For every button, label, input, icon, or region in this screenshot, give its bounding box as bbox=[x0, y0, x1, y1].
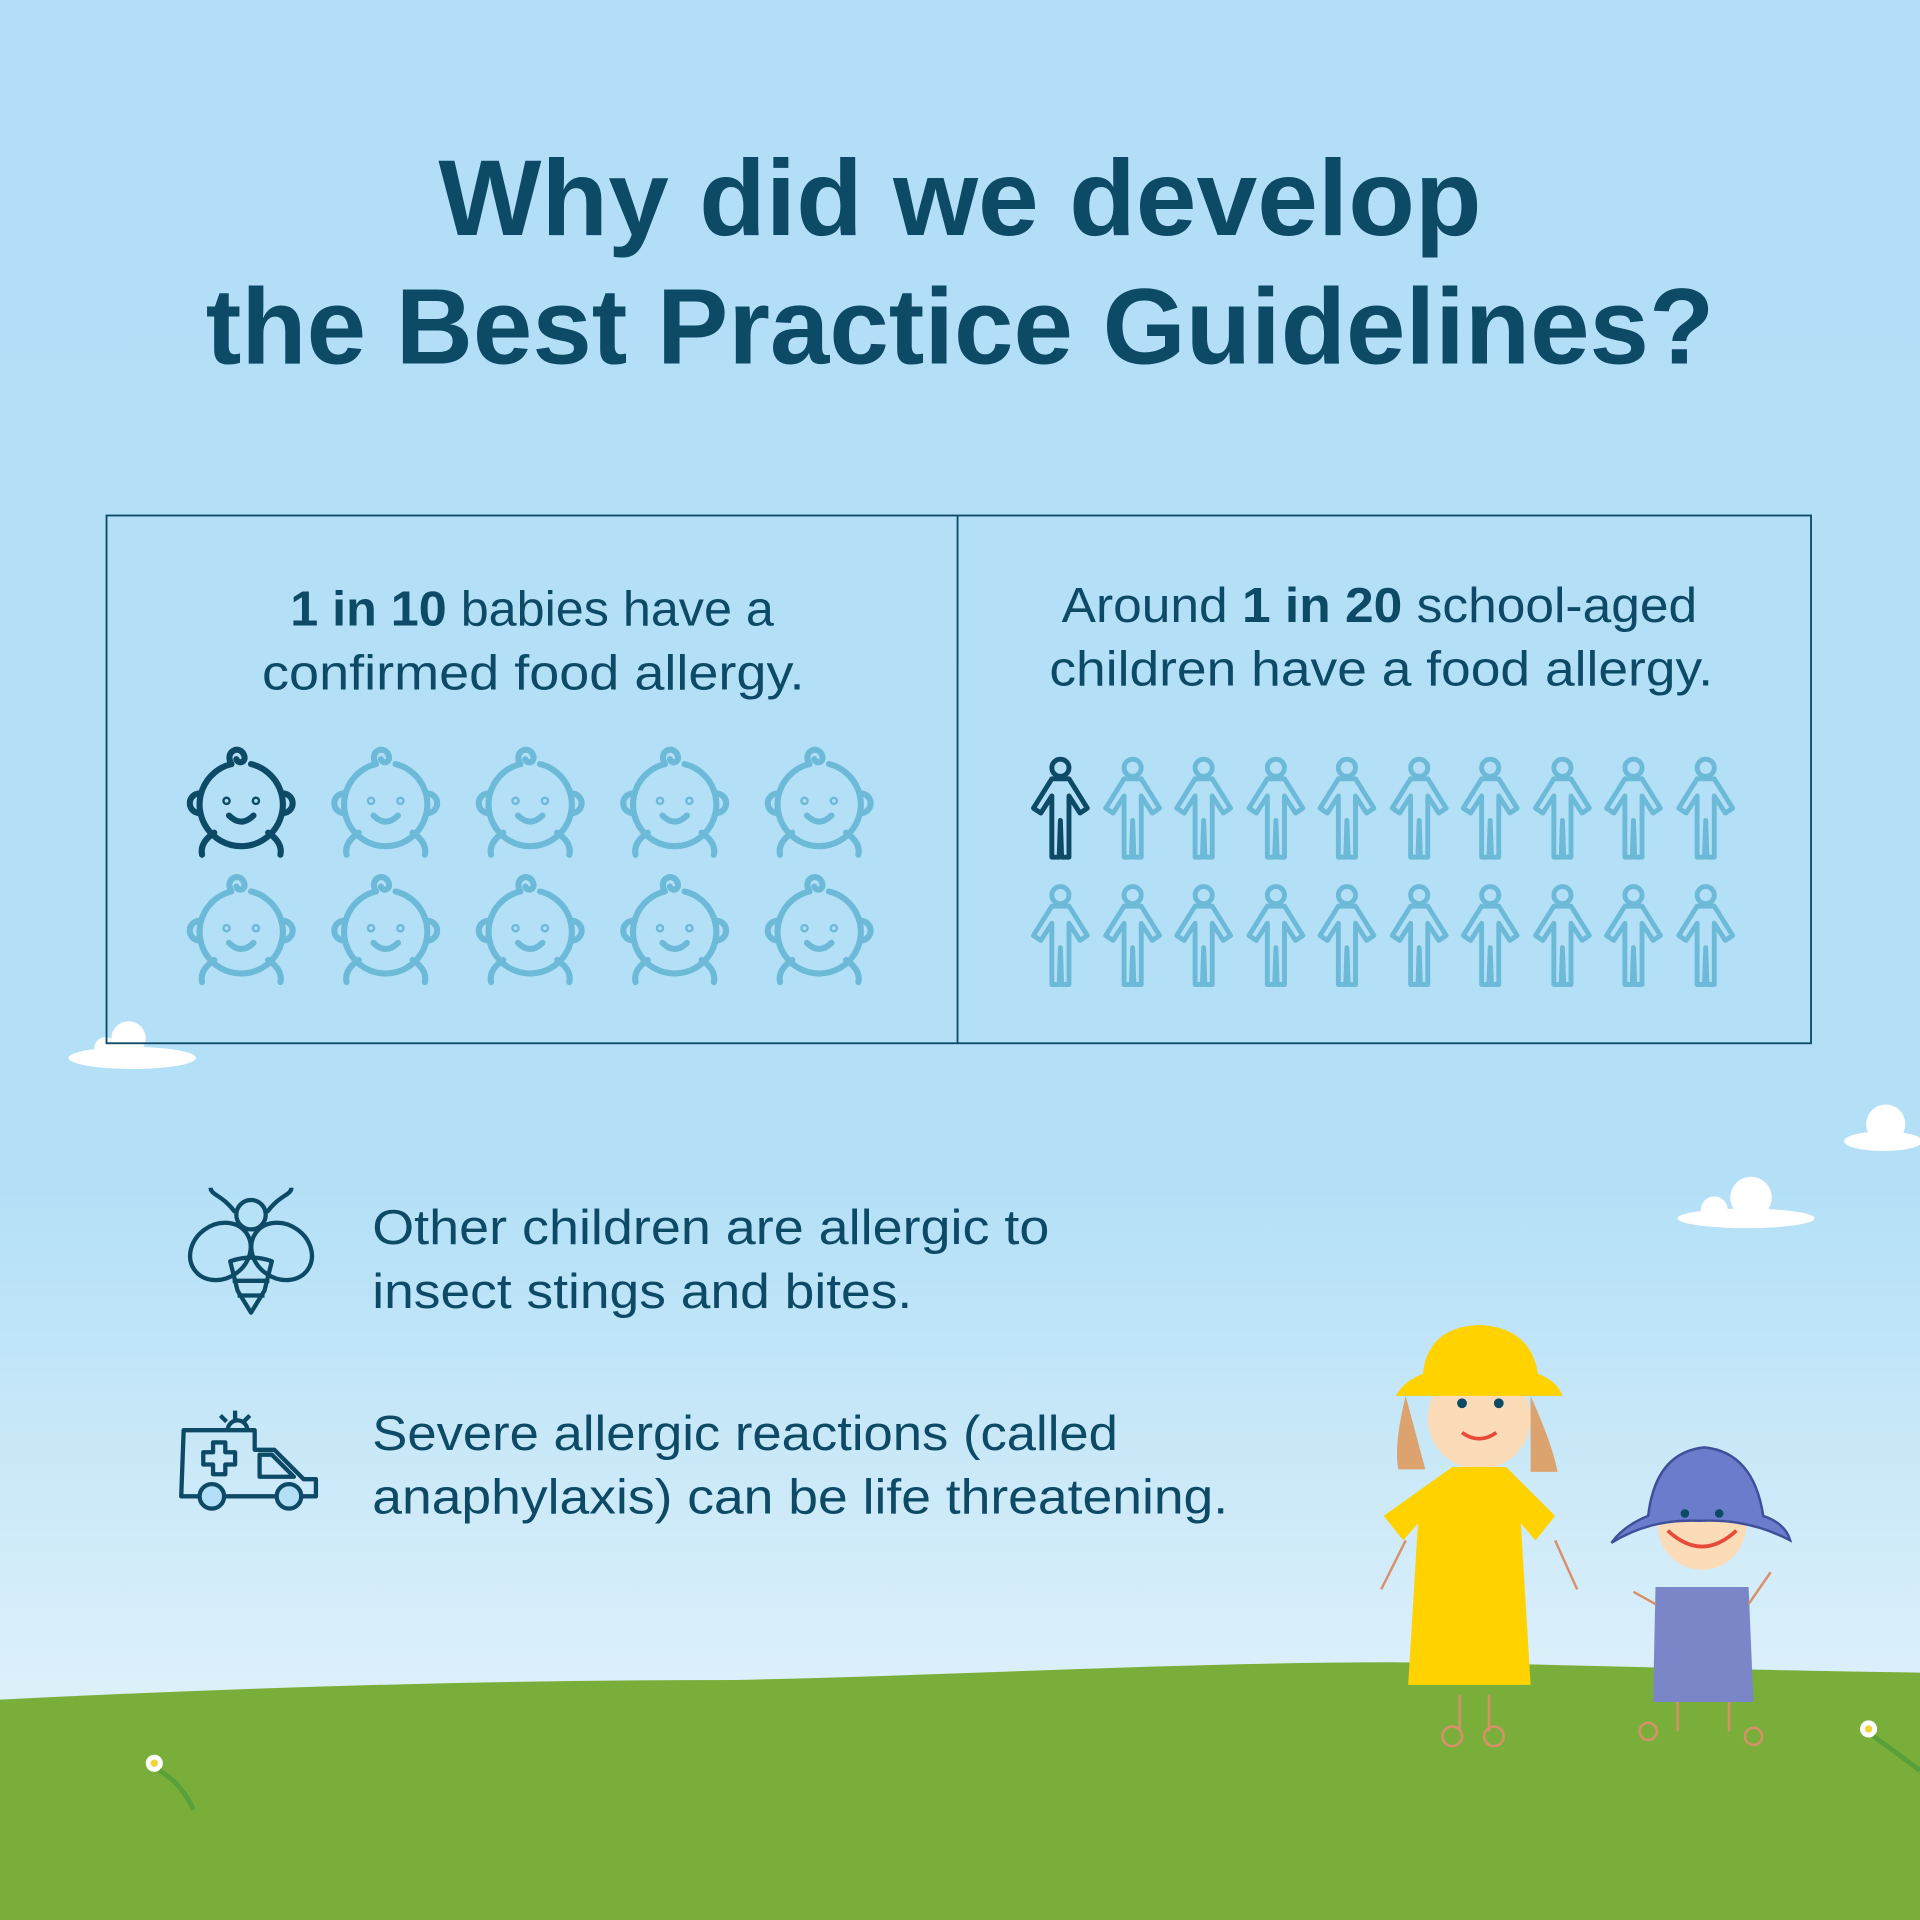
text: anaphylaxis bbox=[372, 1407, 1228, 1524]
title bbox=[206, 137, 1714, 387]
text: babies stat: 1 in 10 babies have a bbox=[290, 583, 775, 637]
text: children stat bbox=[1049, 579, 1713, 697]
illustration: girl with yellow hat bbox=[1381, 1325, 1577, 1746]
cloud left bbox=[69, 1021, 196, 1069]
illustration: boy with blue hat bbox=[1611, 1447, 1790, 1745]
text: insects: Other children are allergic to bbox=[372, 1201, 1049, 1255]
text: children stat: children have a food allergy. bbox=[1049, 643, 1713, 697]
flowers bbox=[146, 1755, 193, 1810]
icons: babies bbox=[190, 750, 871, 982]
cloud right bbox=[1678, 1177, 1815, 1228]
stats panel bbox=[107, 516, 1811, 1043]
text: anaphylaxis: Severe allergic reactions (called bbox=[372, 1407, 1118, 1461]
icons: children bbox=[1033, 759, 1733, 984]
text: babies stat: confirmed food allergy. bbox=[262, 646, 804, 700]
text: insects: insect stings and bites. bbox=[372, 1265, 912, 1319]
icon: ambulance bbox=[181, 1411, 316, 1509]
grass bbox=[0, 1662, 1920, 1920]
text: insects bbox=[372, 1201, 1049, 1319]
text: children stat: Around 1 in 20 school-aged bbox=[1062, 579, 1697, 633]
title: the Best Practice Guidelines? bbox=[206, 266, 1714, 387]
panel: children bbox=[1033, 579, 1733, 984]
title: Why did we develop bbox=[438, 137, 1482, 258]
panel: babies bbox=[190, 583, 871, 982]
cloud right top bbox=[1844, 1104, 1920, 1151]
text: babies stat bbox=[262, 583, 804, 700]
icon: bee bbox=[179, 1188, 323, 1313]
text: anaphylaxis: anaphylaxis) can be life threatening. bbox=[372, 1470, 1228, 1524]
